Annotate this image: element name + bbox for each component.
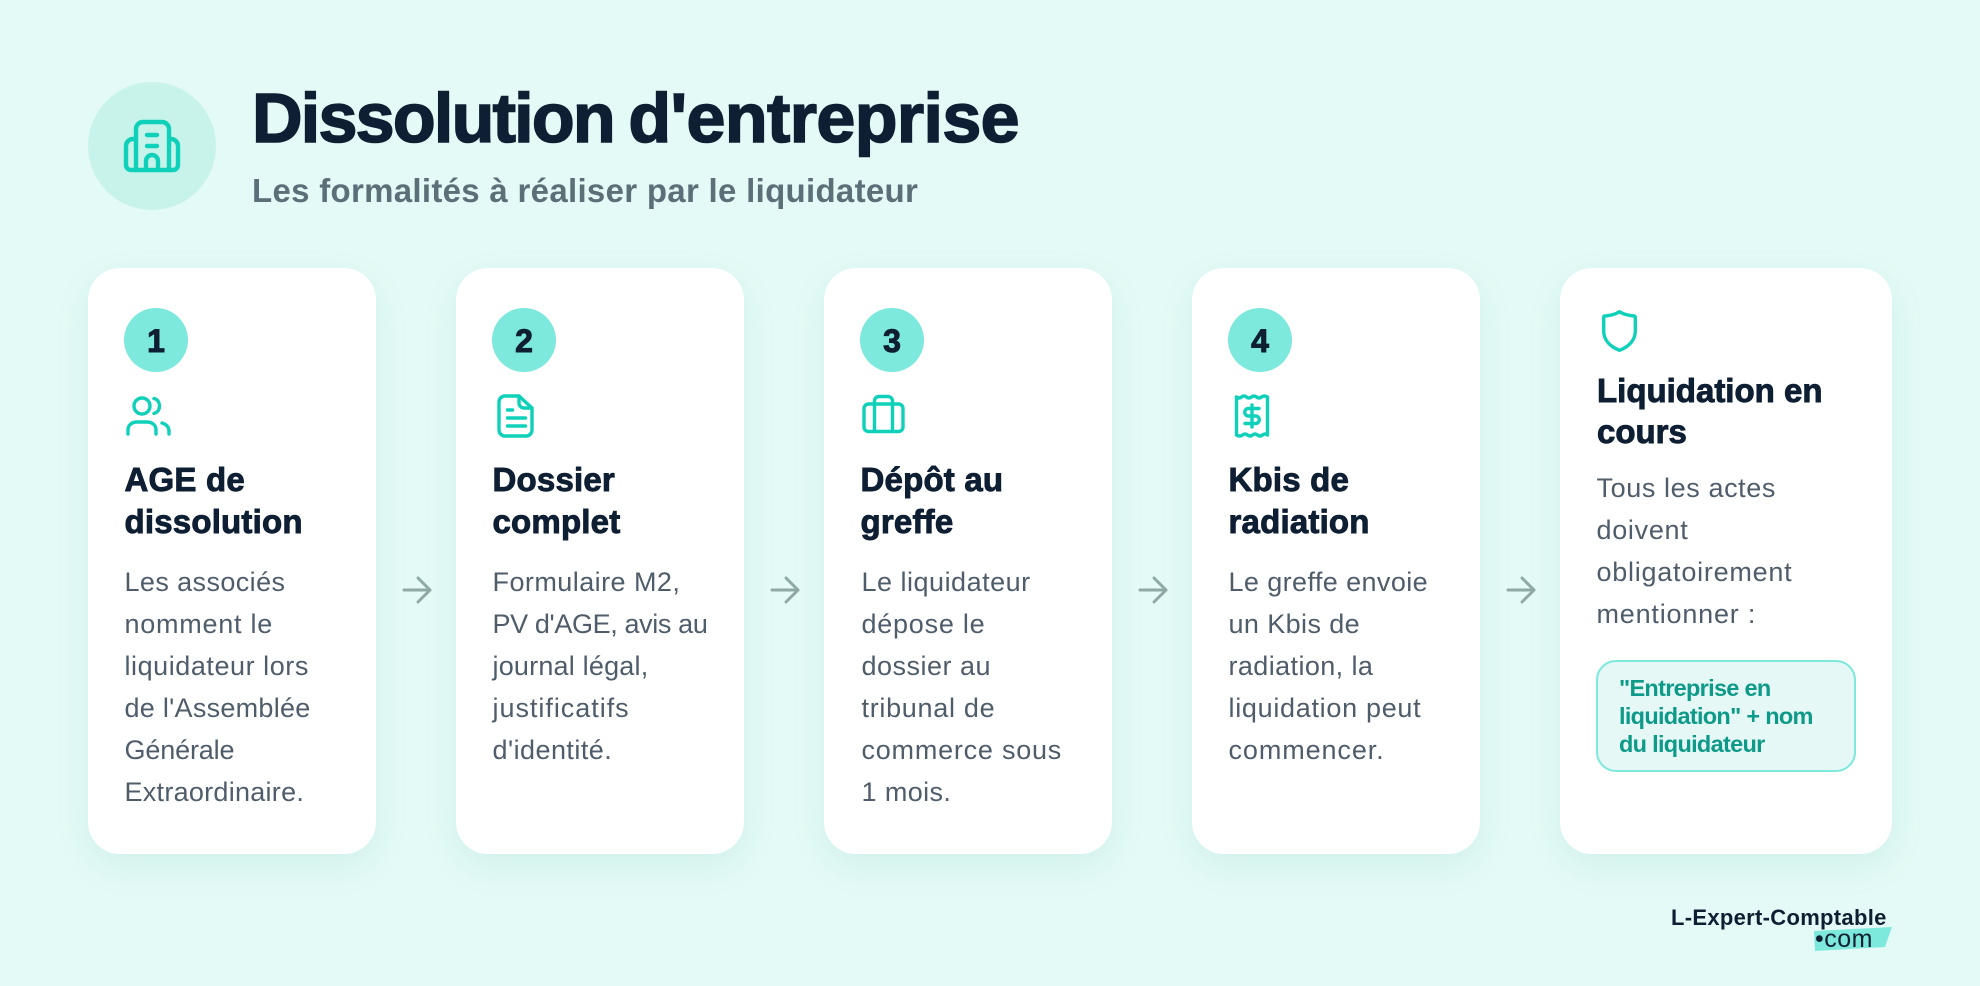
step description: Générale [124, 735, 234, 765]
panel description: doivent [1596, 514, 1688, 544]
step heading [860, 461, 1003, 540]
step description [1228, 567, 1428, 765]
step description: commerce sous [862, 735, 1062, 765]
icon: briefcase [862, 394, 905, 434]
panel: liquidation en cours [1560, 268, 1892, 854]
step heading: Dépôt au [860, 461, 1003, 498]
step description: Le greffe envoie [1228, 567, 1428, 597]
panel description [1596, 472, 1792, 628]
step description: Extraordinaire. [124, 777, 304, 807]
arrow 2 [770, 576, 800, 604]
step number 3 [860, 308, 924, 372]
step description: dossier au [862, 651, 991, 681]
step description [124, 567, 311, 807]
step heading: Dossier [492, 461, 615, 498]
step number 4: 4 [1251, 323, 1269, 359]
step description: commencer. [1228, 735, 1385, 765]
icon: document [497, 394, 534, 438]
step description: nomment le [124, 609, 273, 639]
step heading: greffe [860, 502, 953, 540]
panel heading: cours [1597, 413, 1687, 450]
subtitle: Les formalités à réaliser par le liquidateur [252, 172, 918, 209]
icon: receipt [1234, 394, 1270, 438]
step number 4 [1228, 308, 1292, 372]
panel heading: Liquidation en [1597, 372, 1822, 408]
panel heading [1597, 372, 1822, 450]
panel description: obligatoirement [1596, 556, 1792, 586]
step description: liquidation peut [1228, 693, 1421, 723]
step heading: dissolution [124, 502, 303, 540]
step heading: radiation [1228, 502, 1370, 540]
step heading: complet [492, 502, 620, 540]
step number 2 [492, 308, 556, 372]
panel description: mentionner : [1596, 598, 1756, 628]
step heading [492, 461, 620, 540]
callout: mention obligatoire: "Entreprise en [1619, 675, 1771, 701]
title: Dissolution d'entreprise [252, 79, 1019, 157]
step description [492, 567, 707, 765]
icon: people [126, 396, 171, 436]
callout: mention obligatoire: du liquidateur [1619, 731, 1765, 757]
step description: Le liquidateur [862, 567, 1031, 597]
step description: liquidateur lors [124, 651, 309, 681]
step description: de l'Assemblée [124, 693, 311, 723]
panel: step 3 [824, 268, 1112, 854]
step description: 1 mois. [862, 777, 951, 807]
callout: mention obligatoire [1596, 660, 1856, 772]
step description: PV d'AGE, avis au [492, 609, 707, 639]
step heading: AGE de [124, 461, 245, 498]
panel: step 4 [1192, 268, 1480, 854]
icon: shield [1602, 310, 1637, 352]
step description: dépose le [862, 609, 985, 639]
step description: un Kbis de [1228, 609, 1360, 639]
step description: journal légal, [492, 651, 648, 681]
step description: Les associés [124, 567, 285, 597]
step heading: Kbis de [1228, 461, 1349, 498]
panel: step 1 [88, 268, 376, 854]
step description: Formulaire M2, [492, 567, 680, 597]
logo swash [1814, 927, 1892, 951]
logo wordmark: L-Expert-Comptable [1671, 905, 1887, 930]
arrow 1 [402, 576, 432, 604]
header icon: building [88, 82, 216, 210]
arrow 4 [1506, 576, 1536, 604]
step description: radiation, la [1228, 651, 1373, 681]
logo: L-Expert-Comptable.com [1671, 905, 1892, 953]
panel description: Tous les actes [1596, 472, 1776, 502]
step heading [1228, 461, 1370, 540]
arrow 3 [1138, 576, 1168, 604]
step number 2: 2 [515, 323, 533, 359]
panel: step 2 [456, 268, 744, 854]
logo suffix: •com [1815, 925, 1873, 953]
step number 1: 1 [147, 323, 165, 359]
step number 1 [124, 308, 188, 372]
step description: tribunal de [862, 693, 995, 723]
step heading [124, 461, 303, 540]
step number 3: 3 [883, 323, 901, 359]
step description: justificatifs [492, 693, 630, 723]
step description: d'identité. [492, 735, 612, 765]
callout: mention obligatoire: liquidation" + nom [1619, 703, 1813, 729]
step description [862, 567, 1062, 807]
